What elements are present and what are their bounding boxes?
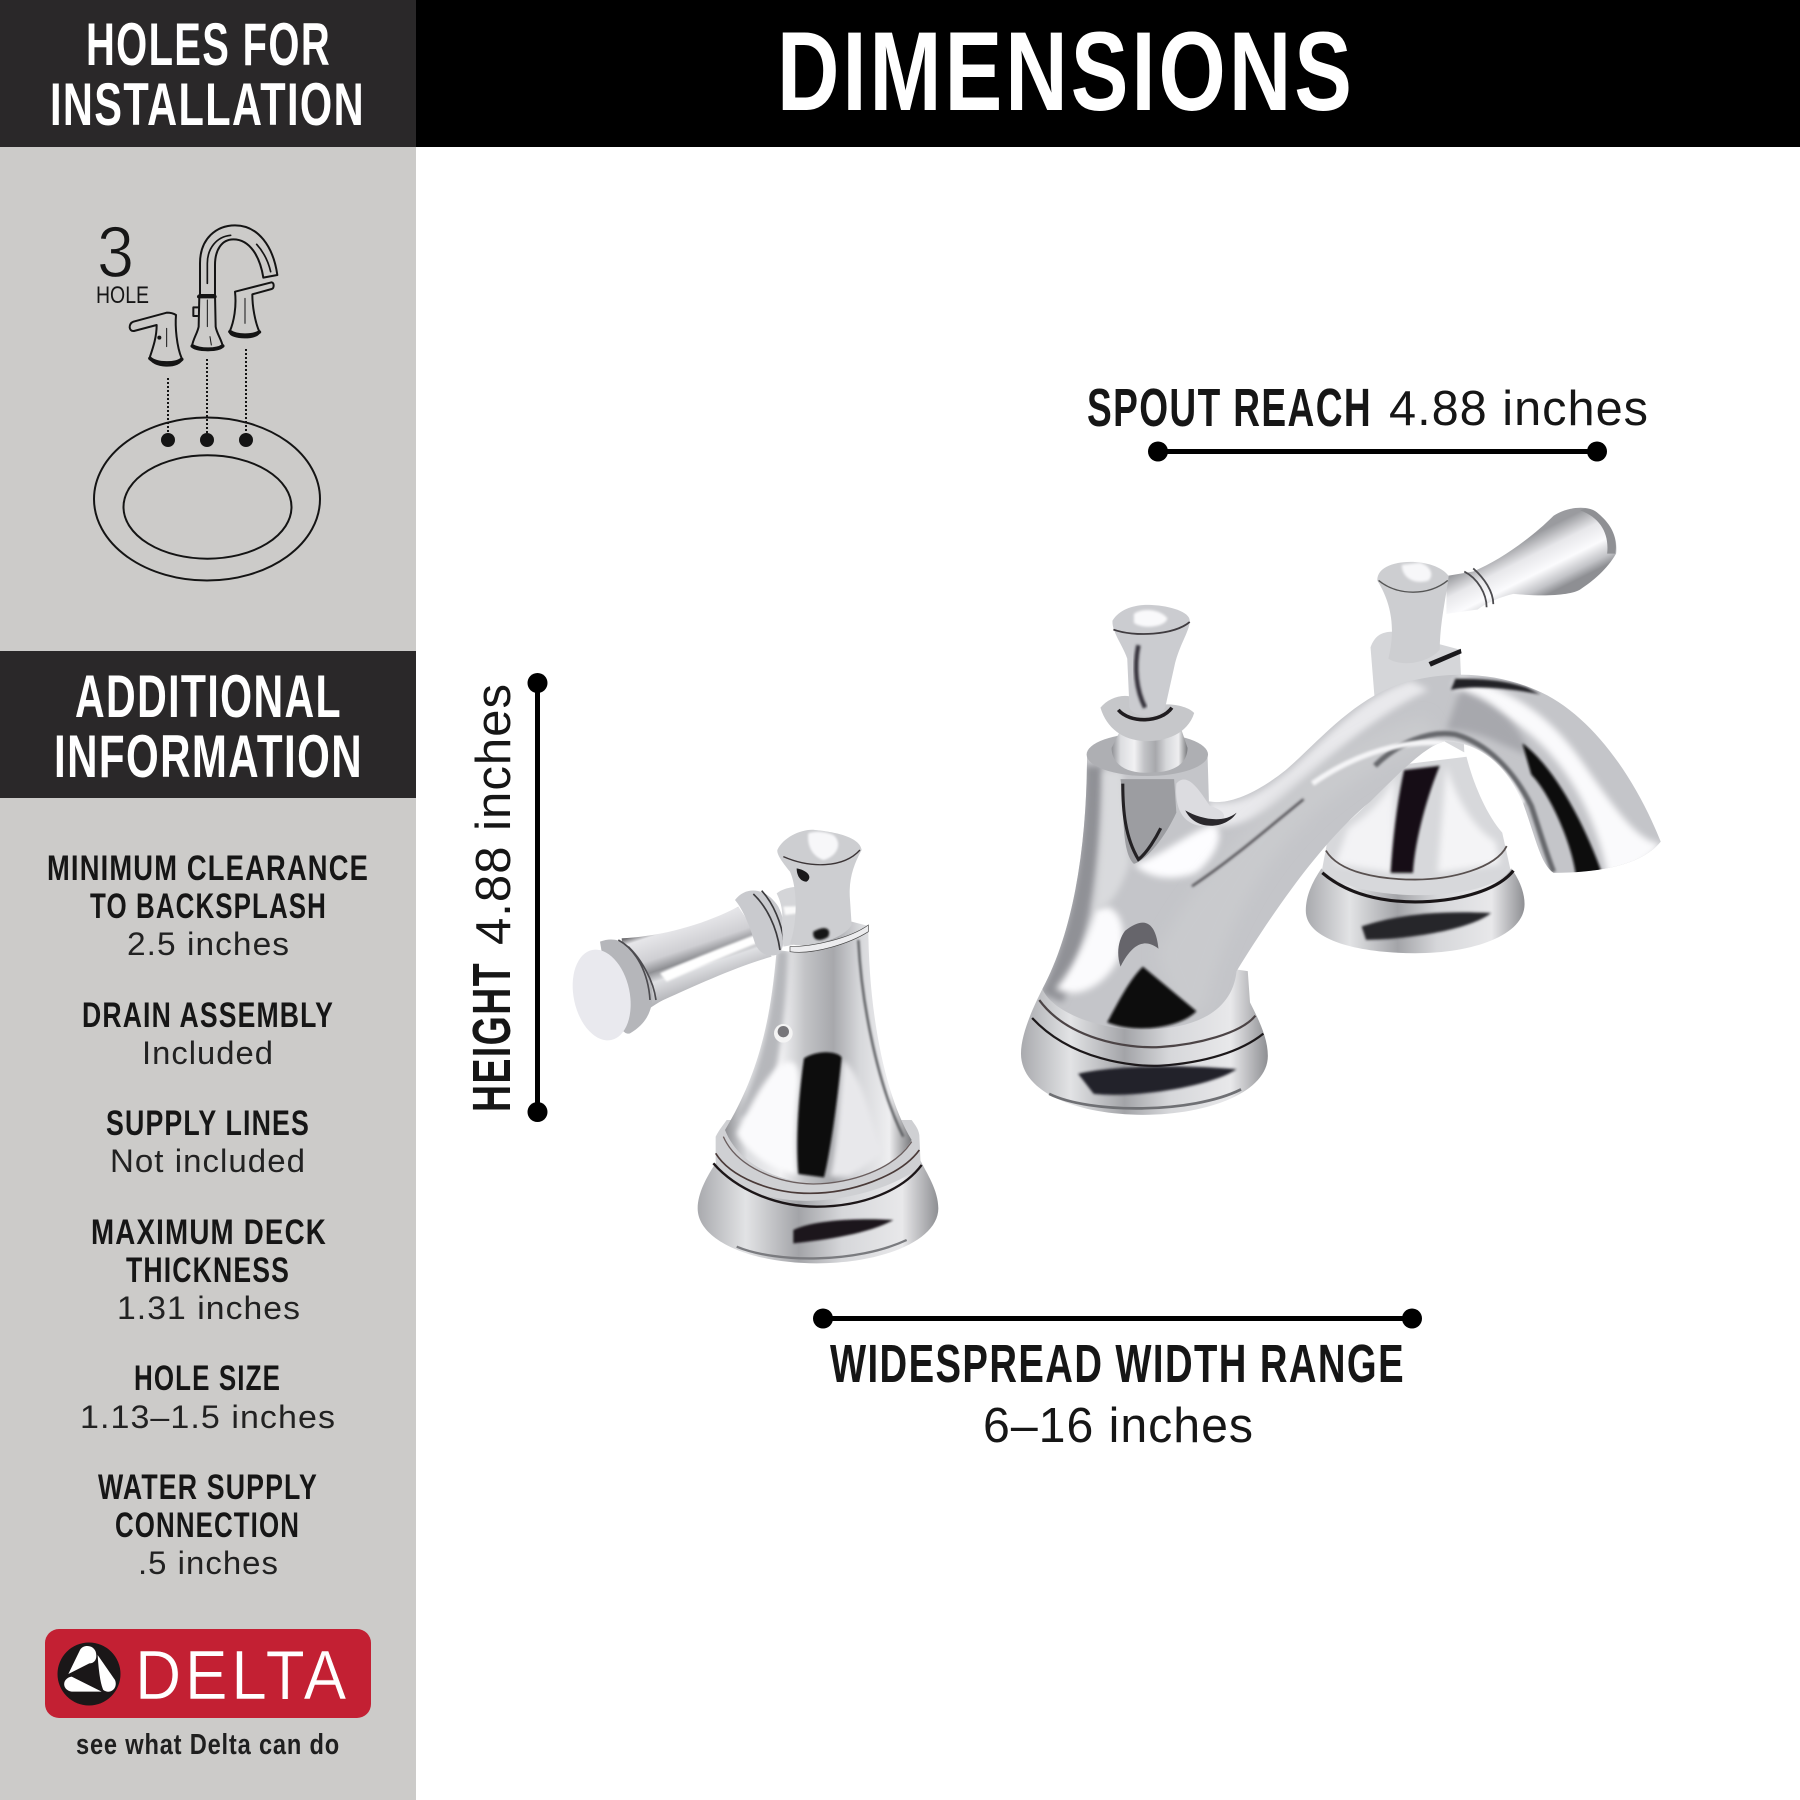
back handle bell and base xyxy=(1306,757,1525,953)
dimension: spout reach: SPOUT REACH xyxy=(1087,378,1372,438)
icon: three hole faucet and sink diagram xyxy=(94,213,320,580)
spec: maximum deck thickness: 1.31 inches xyxy=(117,1290,301,1326)
main body and spout xyxy=(1040,675,1661,1030)
icon: three hole faucet and sink diagram: 3 xyxy=(97,213,134,293)
dimension: widespread width range: WIDESPREAD WIDTH RANGE xyxy=(830,1334,1405,1394)
dimension: spout reach: 4.88 inches xyxy=(1389,382,1649,436)
spec: maximum deck thickness: THICKNESS xyxy=(126,1251,290,1290)
back handle lever xyxy=(1371,508,1616,752)
spec: minimum clearance xyxy=(47,849,369,962)
main base xyxy=(1021,969,1268,1115)
dimension: spout reach xyxy=(1087,378,1649,462)
spec: hole size xyxy=(80,1359,336,1435)
logo: delta: DELTA xyxy=(135,1636,350,1714)
dimension: height: 4.88 inches xyxy=(467,683,521,945)
spec: minimum clearance: MINIMUM CLEARANCE xyxy=(47,849,369,888)
arrow: height span xyxy=(528,673,548,1122)
dimension: widespread width range xyxy=(813,1308,1422,1453)
title: DIMENSIONS xyxy=(777,9,1355,134)
heading: holes for installation xyxy=(0,0,416,147)
spec: drain assembly: DRAIN ASSEMBLY xyxy=(82,996,334,1035)
spec: minimum clearance: 2.5 inches xyxy=(127,926,290,962)
logo: delta: see what Delta can do xyxy=(76,1729,340,1761)
heading: holes for installation: INSTALLATION xyxy=(50,71,365,138)
heading: additional information xyxy=(0,651,416,798)
spec: supply lines: Not included xyxy=(110,1143,306,1179)
dimension: height: HEIGHT xyxy=(462,962,522,1112)
spec: maximum deck thickness xyxy=(91,1213,327,1326)
logo: delta xyxy=(45,1629,371,1761)
arrow: spout reach span xyxy=(1148,442,1607,462)
arrow: width span xyxy=(813,1308,1422,1328)
faucet photo: spout and right handle xyxy=(1021,508,1661,1115)
faucet photo: left handle xyxy=(565,830,938,1263)
spec: water supply connection: CONNECTION xyxy=(115,1506,300,1545)
spec: drain assembly xyxy=(82,996,334,1071)
spec: drain assembly: Included xyxy=(142,1035,274,1071)
dimension: widespread width range: 6–16 inches xyxy=(983,1399,1254,1453)
title bar: dimensions xyxy=(416,0,1800,147)
sidebar panel xyxy=(0,0,416,1800)
spec: supply lines xyxy=(106,1104,310,1179)
spec: hole size: 1.13–1.5 inches xyxy=(80,1399,336,1435)
spec: water supply connection: WATER SUPPLY xyxy=(98,1468,318,1507)
spec: hole size: HOLE SIZE xyxy=(134,1359,281,1398)
heading: holes for installation: HOLES FOR xyxy=(86,11,331,78)
heading: additional information: ADDITIONAL xyxy=(75,663,342,730)
spec: maximum deck thickness: MAXIMUM DECK xyxy=(91,1213,327,1252)
popup knob xyxy=(1087,605,1208,776)
spec: supply lines: SUPPLY LINES xyxy=(106,1104,310,1143)
spec: water supply connection xyxy=(98,1468,318,1581)
icon: three hole faucet and sink diagram: HOLE xyxy=(96,282,149,309)
heading: additional information: INFORMATION xyxy=(54,723,363,790)
spec: water supply connection: .5 inches xyxy=(138,1545,279,1581)
spec: minimum clearance: TO BACKSPLASH xyxy=(90,887,327,926)
dimension: height xyxy=(462,673,548,1122)
